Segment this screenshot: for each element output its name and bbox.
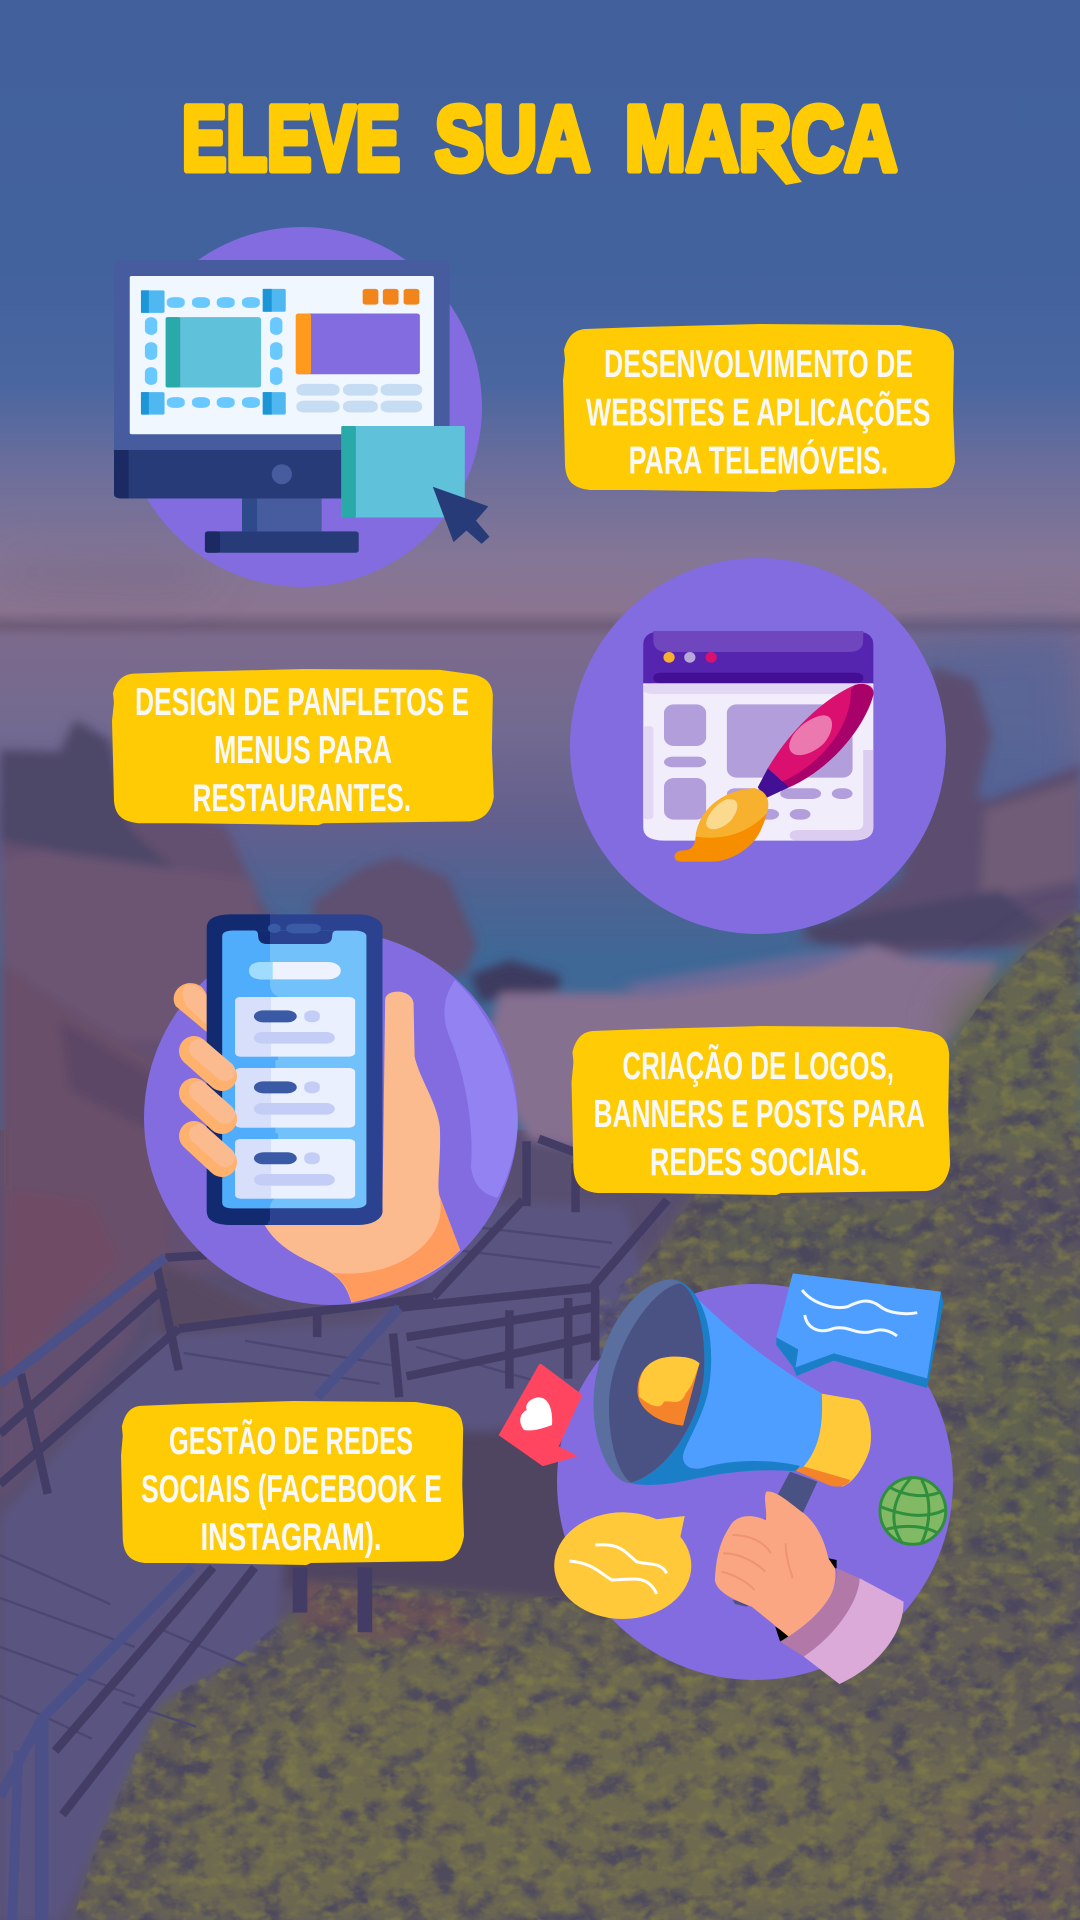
icon: computer monitor <box>114 260 489 553</box>
icon: paintbrush <box>675 684 873 862</box>
panel: websites text: DESENVOLVIMENTO DE <box>604 343 913 386</box>
panel: social posts illustration <box>144 914 518 1305</box>
icon: hand holding smartphone <box>174 914 518 1303</box>
icon: browser window with paintbrush <box>643 631 873 862</box>
panel: flyers illustration <box>570 558 946 934</box>
icon: hand gripping megaphone <box>715 1492 904 1684</box>
panel: websites illustration <box>114 227 489 587</box>
panel: flyers text: RESTAURANTES. <box>193 777 411 820</box>
title: SUA <box>435 88 590 190</box>
icon: chat bubble blue <box>776 1273 944 1388</box>
panel: social management text: SOCIAIS (FACEBOOK E <box>141 1468 442 1511</box>
icon: cursor arrow <box>433 487 489 544</box>
icon: purple circle <box>144 931 518 1305</box>
icon: heart badge <box>500 1365 581 1465</box>
icon: purple circle <box>122 227 482 587</box>
panel: websites text: WEBSITES E APLICAÇÕES <box>586 390 930 434</box>
icon: purple circle <box>557 1284 953 1680</box>
panel: social posts text: CRIAÇÃO DE LOGOS, <box>622 1044 894 1088</box>
title <box>182 88 897 190</box>
icon: green globe <box>880 1478 946 1544</box>
title: MARCA <box>625 88 897 190</box>
icon: purple circle <box>570 558 946 934</box>
panel: flyers text: MENUS PARA <box>214 729 392 772</box>
panel: flyers text <box>112 669 494 825</box>
panel: social management text: INSTAGRAM). <box>200 1516 382 1559</box>
panel: social management text <box>121 1401 464 1565</box>
panel: websites text: PARA TELEMÓVEIS. <box>629 438 888 482</box>
title: ELEVE <box>182 88 400 190</box>
panel: social management illustration <box>500 1273 953 1684</box>
panel: websites text <box>563 324 955 492</box>
icon: megaphone <box>594 1279 871 1547</box>
icon: yellow speech bubble <box>554 1512 691 1619</box>
panel: social posts text: REDES SOCIAIS. <box>650 1141 867 1184</box>
panel: social management text: GESTÃO DE REDES <box>169 1419 413 1463</box>
panel: social posts text: BANNERS E POSTS PARA <box>594 1093 925 1136</box>
panel: social posts text <box>572 1026 950 1195</box>
panel: flyers text: DESIGN DE PANFLETOS E <box>135 681 469 724</box>
